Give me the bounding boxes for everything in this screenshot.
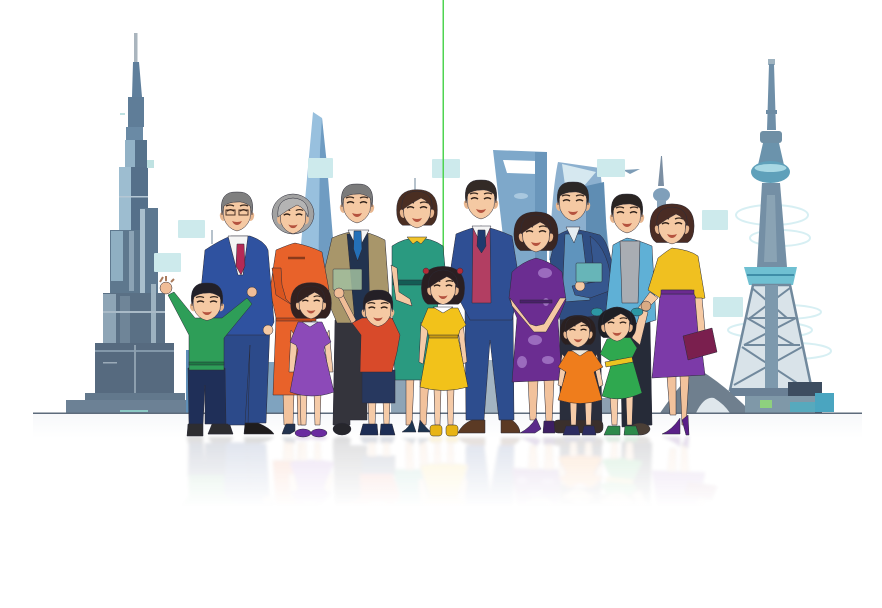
person: young man in light blue jacket [606,194,656,435]
floating info panels [154,158,743,317]
child: girl in orange dress [558,315,603,435]
person: mother in teal dress [391,190,446,432]
child: boy in green shirt [160,276,257,436]
person: man in dark blue jacket [550,182,615,433]
child: girl in green dress [591,301,651,435]
person: woman in yellow top and purple skirt [638,204,717,435]
ground line [33,412,862,414]
green vertical line [442,0,444,272]
skyline: curved glass tower [549,162,640,260]
skyline: small pod tower [211,156,670,244]
person: woman in purple dress [509,212,566,433]
child: girl in lavender dress [289,283,334,437]
child: girl in yellow dress [419,266,468,436]
skyline: right broadcast tower [660,59,834,413]
skyline: bottle opener tower [483,150,615,413]
person: grandmother in orange dress [270,194,329,434]
family group [160,180,717,437]
child: boy in red shirt [334,288,400,435]
person: man in blue suit with maroon vest [449,180,520,433]
person: grandfather in blue suit [199,192,274,434]
illustration: family and skyline [33,0,862,490]
skyline: twin spire tower [186,112,410,413]
reflection of the family [186,435,714,490]
floor sheen [33,414,862,438]
skyline: left supertall tower [66,33,187,413]
person: grandfather in tan jacket [321,184,391,435]
